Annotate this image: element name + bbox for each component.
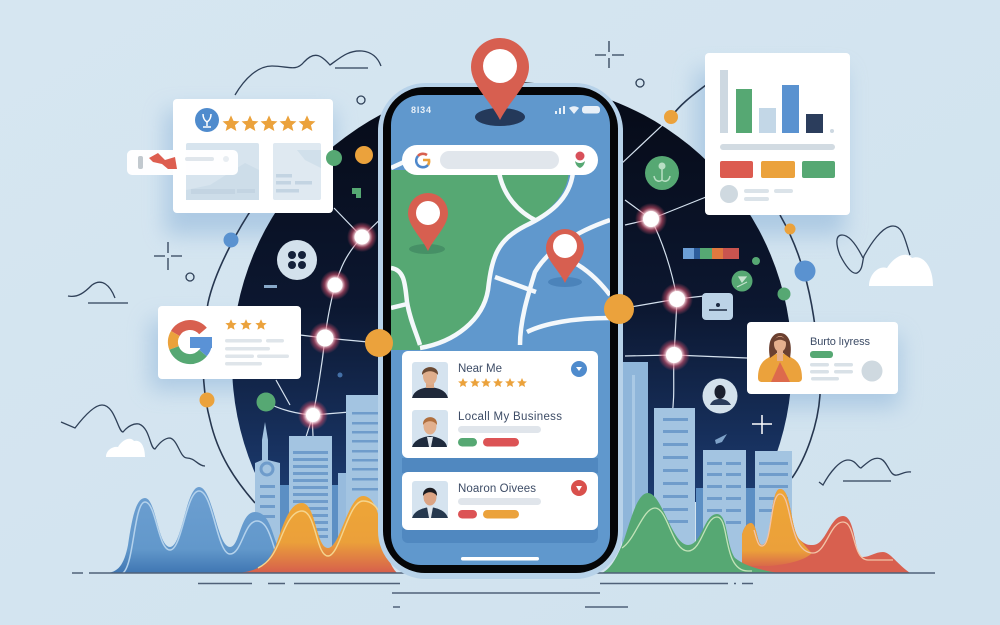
home bar	[461, 557, 539, 560]
label: Burto lıyress: Burto lıyress	[810, 336, 870, 348]
google card	[158, 306, 301, 379]
colour legend blocks	[720, 161, 835, 178]
detail bar	[458, 426, 541, 433]
area chart: green hills	[602, 493, 778, 573]
crosshair left	[154, 242, 182, 270]
map roads	[391, 160, 610, 350]
person card	[747, 322, 898, 394]
review thumbnail left	[186, 143, 259, 200]
small green pin icon	[732, 270, 752, 292]
city right	[622, 362, 792, 573]
three stars	[225, 319, 267, 330]
phone screen	[391, 95, 610, 565]
cloud lower left	[106, 439, 145, 457]
small rings	[186, 79, 644, 281]
squiggle lower right	[819, 458, 911, 485]
phone status icons	[555, 106, 600, 114]
Google G logo	[173, 325, 212, 359]
dark night sky circle	[232, 82, 790, 502]
review thumbnail right	[273, 143, 321, 200]
label: Noaron Oivees: Noaron Oivees	[458, 483, 536, 495]
squiggle right	[837, 226, 910, 273]
legend footer	[720, 185, 793, 203]
infographic canvas	[60, 38, 935, 608]
map pin left	[408, 193, 448, 254]
plus icon	[752, 415, 772, 434]
glowing network nodes	[298, 203, 693, 430]
small arrow glyph	[715, 434, 727, 444]
green square glyph	[352, 188, 361, 198]
filter badge blue	[571, 361, 587, 377]
result card 2	[402, 472, 598, 530]
search bar	[402, 145, 598, 175]
five stars	[223, 115, 315, 131]
profile icon	[702, 378, 738, 414]
squiggle mid left	[68, 282, 128, 303]
squiggle lower left	[61, 405, 205, 466]
label: Local My Business: Locall My Business	[458, 411, 562, 423]
tags	[458, 510, 519, 518]
rating stars	[458, 378, 527, 387]
portrait: Noaron	[412, 481, 448, 518]
bar chart card	[705, 53, 850, 215]
search icon	[575, 152, 585, 168]
city left	[255, 395, 380, 573]
network lines	[266, 117, 747, 440]
tags	[458, 438, 519, 446]
portrait woman	[758, 333, 802, 382]
lower sky band	[278, 485, 656, 573]
area chart: red and yellow hills	[742, 489, 910, 573]
shadows behind cards	[150, 70, 900, 407]
Google G small	[416, 154, 429, 167]
bars	[720, 70, 834, 133]
filter badge red	[571, 480, 587, 496]
portrait: Near Me	[412, 362, 448, 398]
orbit arc right	[671, 85, 820, 478]
card shadow band	[402, 458, 598, 473]
badge icon	[195, 108, 219, 132]
result card 1	[402, 351, 598, 458]
portrait: Local business	[412, 410, 448, 447]
detail bar	[458, 498, 541, 505]
app dots icon	[277, 240, 317, 280]
phone	[378, 83, 623, 579]
big location pin	[471, 38, 529, 126]
crosshair top right	[595, 41, 624, 68]
coloured network dots	[200, 110, 816, 412]
phone body	[378, 83, 623, 579]
review card	[173, 99, 333, 213]
small overlay card	[127, 150, 238, 175]
text lines	[810, 363, 853, 380]
green anchor icon	[645, 156, 679, 190]
small dash glyph	[264, 285, 277, 288]
area chart: blue hills	[105, 487, 300, 573]
area chart: orange hills	[238, 496, 397, 573]
device icon	[702, 293, 733, 320]
map green area	[391, 170, 569, 350]
map pin right	[546, 229, 584, 287]
colour strip	[683, 248, 739, 259]
squiggle top left	[235, 51, 381, 95]
phone status text: 8I34	[411, 105, 431, 115]
text lines	[225, 339, 289, 366]
label: Near Me: Near Me	[458, 363, 502, 375]
orbit arc left	[203, 200, 258, 503]
cloud right	[869, 255, 933, 286]
baseline and ground dashes	[72, 573, 935, 607]
